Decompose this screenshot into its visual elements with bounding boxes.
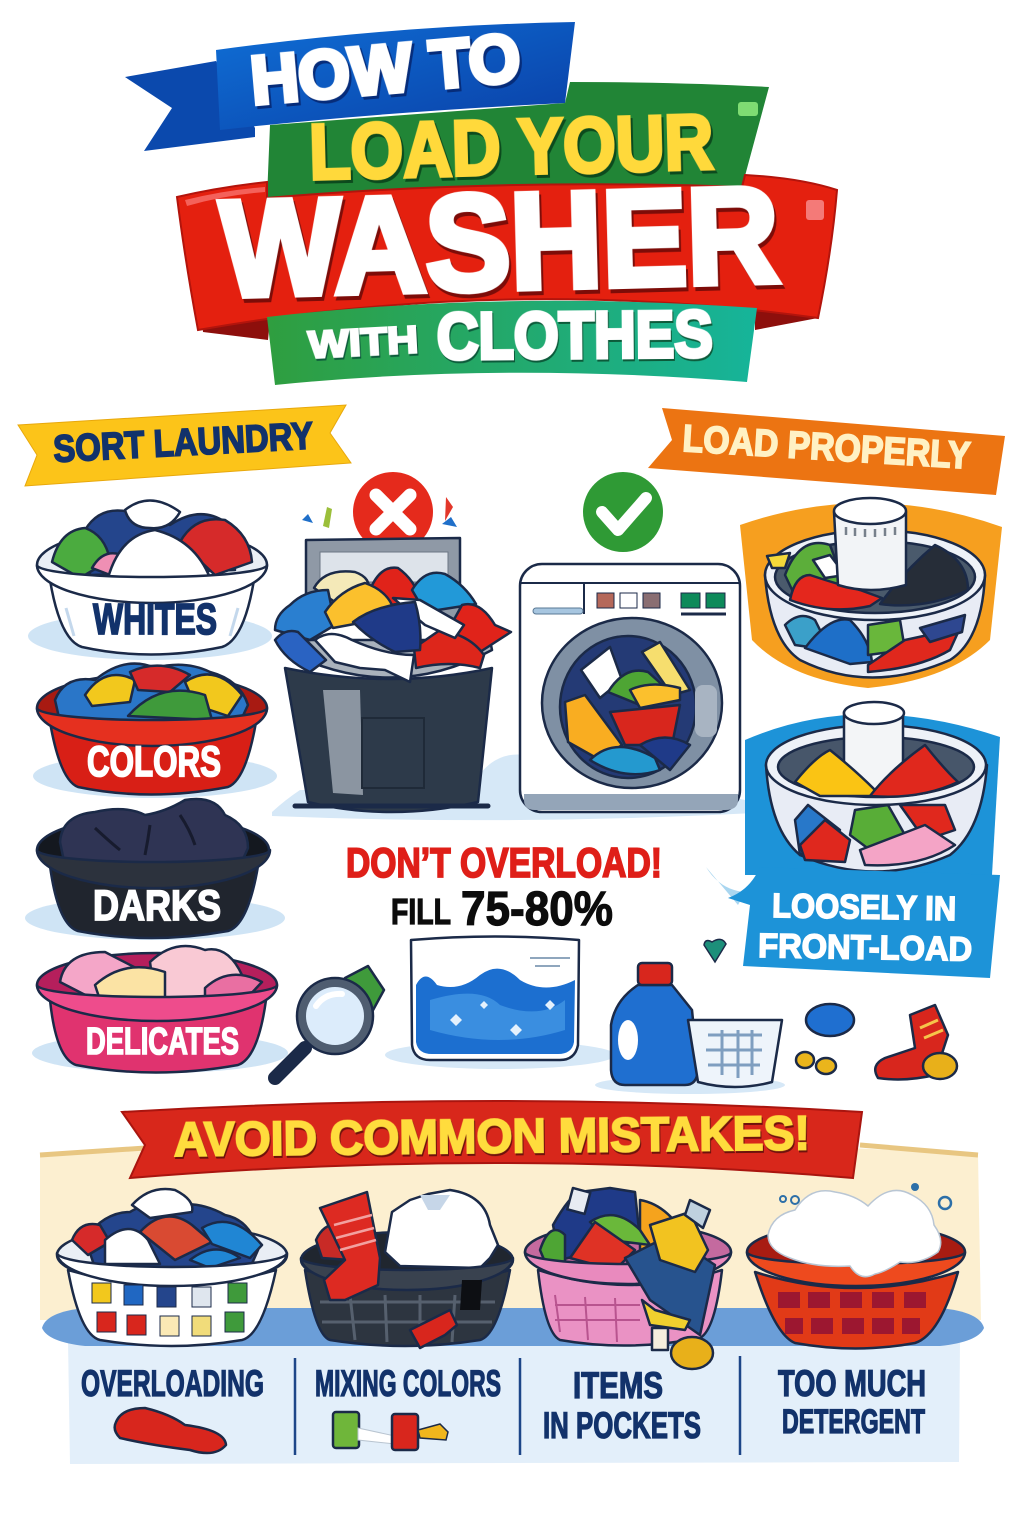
- basket: overloading: [57, 1189, 287, 1346]
- mistake labels: OVERLOADING: [81, 1363, 264, 1404]
- title: [125, 20, 837, 385]
- icon: pods and coins: [796, 1004, 854, 1074]
- basket: darks: DARKS: [93, 882, 221, 930]
- basket: delicates: [32, 946, 288, 1073]
- text: don't overload: DON’T OVERLOAD!: [346, 839, 662, 886]
- panel background: [40, 1140, 981, 1320]
- basket: whites: [28, 500, 272, 660]
- basket: too much detergent: [747, 1183, 965, 1348]
- title banner: with clothes: [267, 297, 757, 385]
- heading: load properly: LOAD PROPERLY: [681, 418, 971, 478]
- mistake labels: [81, 1356, 926, 1455]
- panel: front-load blue with tub: [745, 702, 1000, 875]
- icon: magnifier: [275, 966, 384, 1078]
- panel: avoid common mistakes: [40, 1101, 984, 1464]
- basket: colors: [33, 664, 277, 798]
- icon: red sock: [875, 1005, 957, 1079]
- text: don't overload: [346, 839, 662, 936]
- mistake labels: MIXING COLORS: [315, 1363, 501, 1404]
- basket: delicates: DELICATES: [86, 1021, 239, 1063]
- basket: colors: COLORS: [87, 738, 221, 786]
- callout: loosely in front-load: [706, 867, 1000, 978]
- title banner: how to: HOW TO: [248, 20, 523, 119]
- floor shadow: [272, 754, 775, 820]
- overloaded top-load washer: [275, 538, 511, 812]
- pile of clothes: [275, 568, 511, 682]
- icon: green check: [583, 472, 663, 552]
- heading: sort laundry: SORT LAUNDRY: [52, 415, 314, 471]
- icon: detergent bottle and cup: [595, 963, 785, 1094]
- panel: top-load orange: [740, 498, 1002, 688]
- title banner: how to: [125, 20, 575, 151]
- icon: small heart: [704, 939, 726, 962]
- basket: items in pockets: [525, 1188, 731, 1369]
- front-load washer: [520, 564, 740, 812]
- basket: mixing colors: [301, 1190, 513, 1348]
- icon: water tub: [385, 936, 615, 1069]
- panel: sort baskets: [25, 500, 288, 1073]
- callout: loosely in front-load: FRONT-LOAD: [758, 927, 972, 969]
- heading banner: AVOID COMMON MISTAKES!: [174, 1107, 810, 1167]
- callout: loosely in front-load: LOOSELY IN: [772, 887, 956, 928]
- text: don't overload: 75-80%: [461, 883, 613, 936]
- heading: sort laundry: [18, 405, 351, 486]
- title banner: with clothes: WITH: [307, 319, 419, 367]
- icon: red x: [302, 472, 457, 552]
- title banner: with clothes: CLOTHES: [436, 297, 713, 373]
- basket: darks: [25, 799, 285, 940]
- heading: load properly: [648, 408, 1005, 495]
- title banner: load your: LOAD YOUR: [308, 97, 714, 196]
- basket: whites: WHITES: [93, 595, 217, 644]
- text: don't overload: FILL: [391, 891, 451, 932]
- mistake labels: TOO MUCH: [778, 1363, 926, 1404]
- mistake labels: IN POCKETS: [543, 1405, 701, 1446]
- mistake labels: ITEMS: [573, 1365, 663, 1406]
- mistake labels: DETERGENT: [782, 1403, 925, 1441]
- title banner: washer: WASHER: [219, 158, 781, 325]
- heading banner: [122, 1101, 862, 1178]
